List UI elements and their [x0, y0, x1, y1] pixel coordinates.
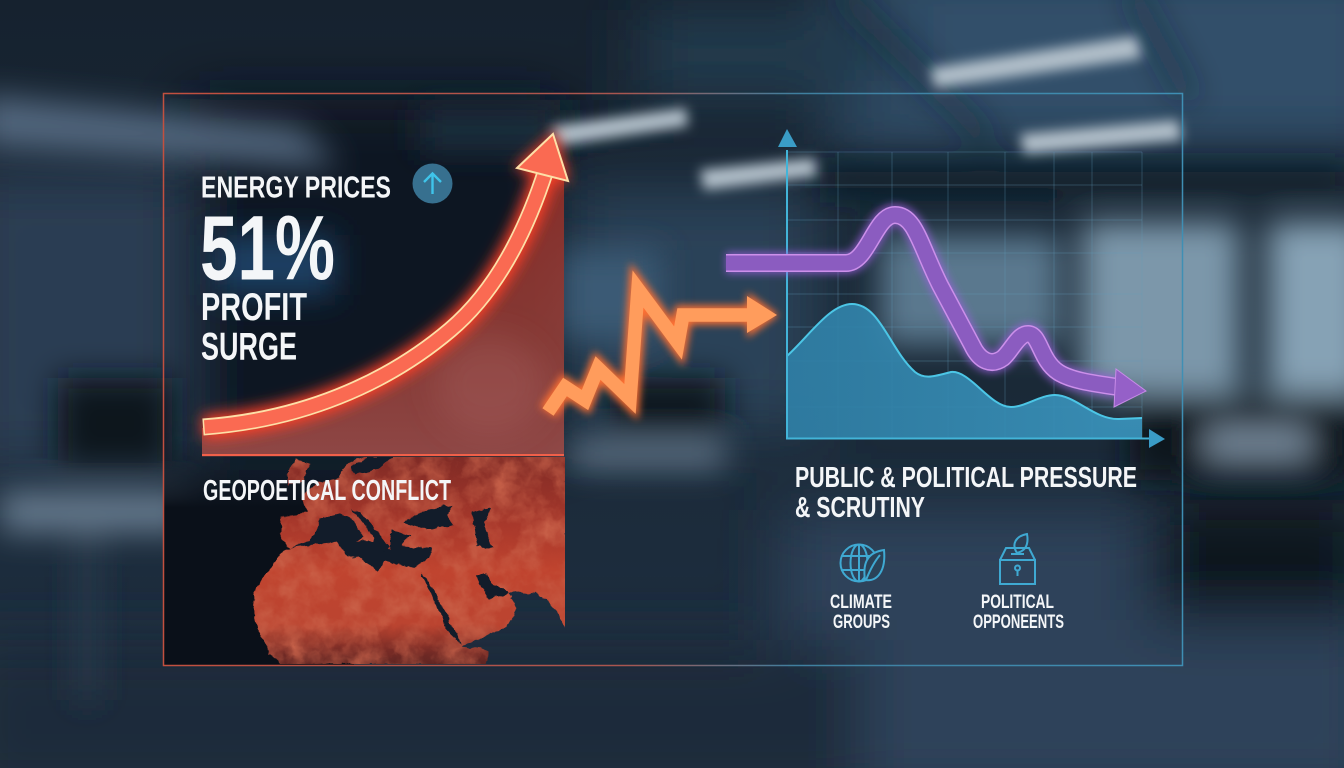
glow	[203, 140, 562, 427]
arrow: purple trend	[726, 215, 1146, 407]
icon: globe with leaf	[840, 544, 884, 582]
map: geopolitical region	[253, 455, 567, 667]
rising arrow	[203, 134, 568, 427]
arrow: orange zigzag	[548, 289, 777, 412]
frame panel	[164, 94, 1182, 666]
heading: energy prices: ENERGY PRICES	[201, 170, 391, 204]
chart: public pressure	[726, 129, 1165, 448]
label: political opponents	[973, 592, 1064, 633]
red area under curve	[202, 178, 564, 455]
axes	[787, 150, 1150, 438]
label: political opponents: POLITICAL	[981, 592, 1054, 613]
label: climate groups: GROUPS	[833, 612, 890, 633]
heading: public and political pressure	[795, 462, 1137, 524]
panel: energy prices chart	[202, 134, 568, 456]
blue area	[787, 304, 1142, 438]
baseline	[202, 454, 564, 456]
icon: up arrow badge	[412, 164, 452, 204]
label: profit surge: PROFIT	[201, 286, 307, 329]
heading: public and political pressure: & SCRUTINY	[795, 492, 925, 524]
icon: ballot box with leaf	[1000, 534, 1035, 584]
stat: 51%: 51%	[200, 198, 335, 300]
heading: geopoetical conflict: GEOPOETICAL CONFLICT	[203, 475, 451, 507]
area highlight	[442, 337, 538, 426]
grid	[787, 152, 1142, 438]
label: climate groups: CLIMATE	[830, 592, 892, 613]
label: profit surge	[201, 286, 307, 368]
purple glow	[726, 215, 1118, 387]
heading: public and political pressure: PUBLIC & POLITICAL PRESSURE	[795, 462, 1137, 494]
label: profit surge: SURGE	[201, 326, 297, 368]
label: political opponents: OPPONEENTS	[973, 612, 1064, 633]
label: climate groups	[830, 592, 892, 633]
